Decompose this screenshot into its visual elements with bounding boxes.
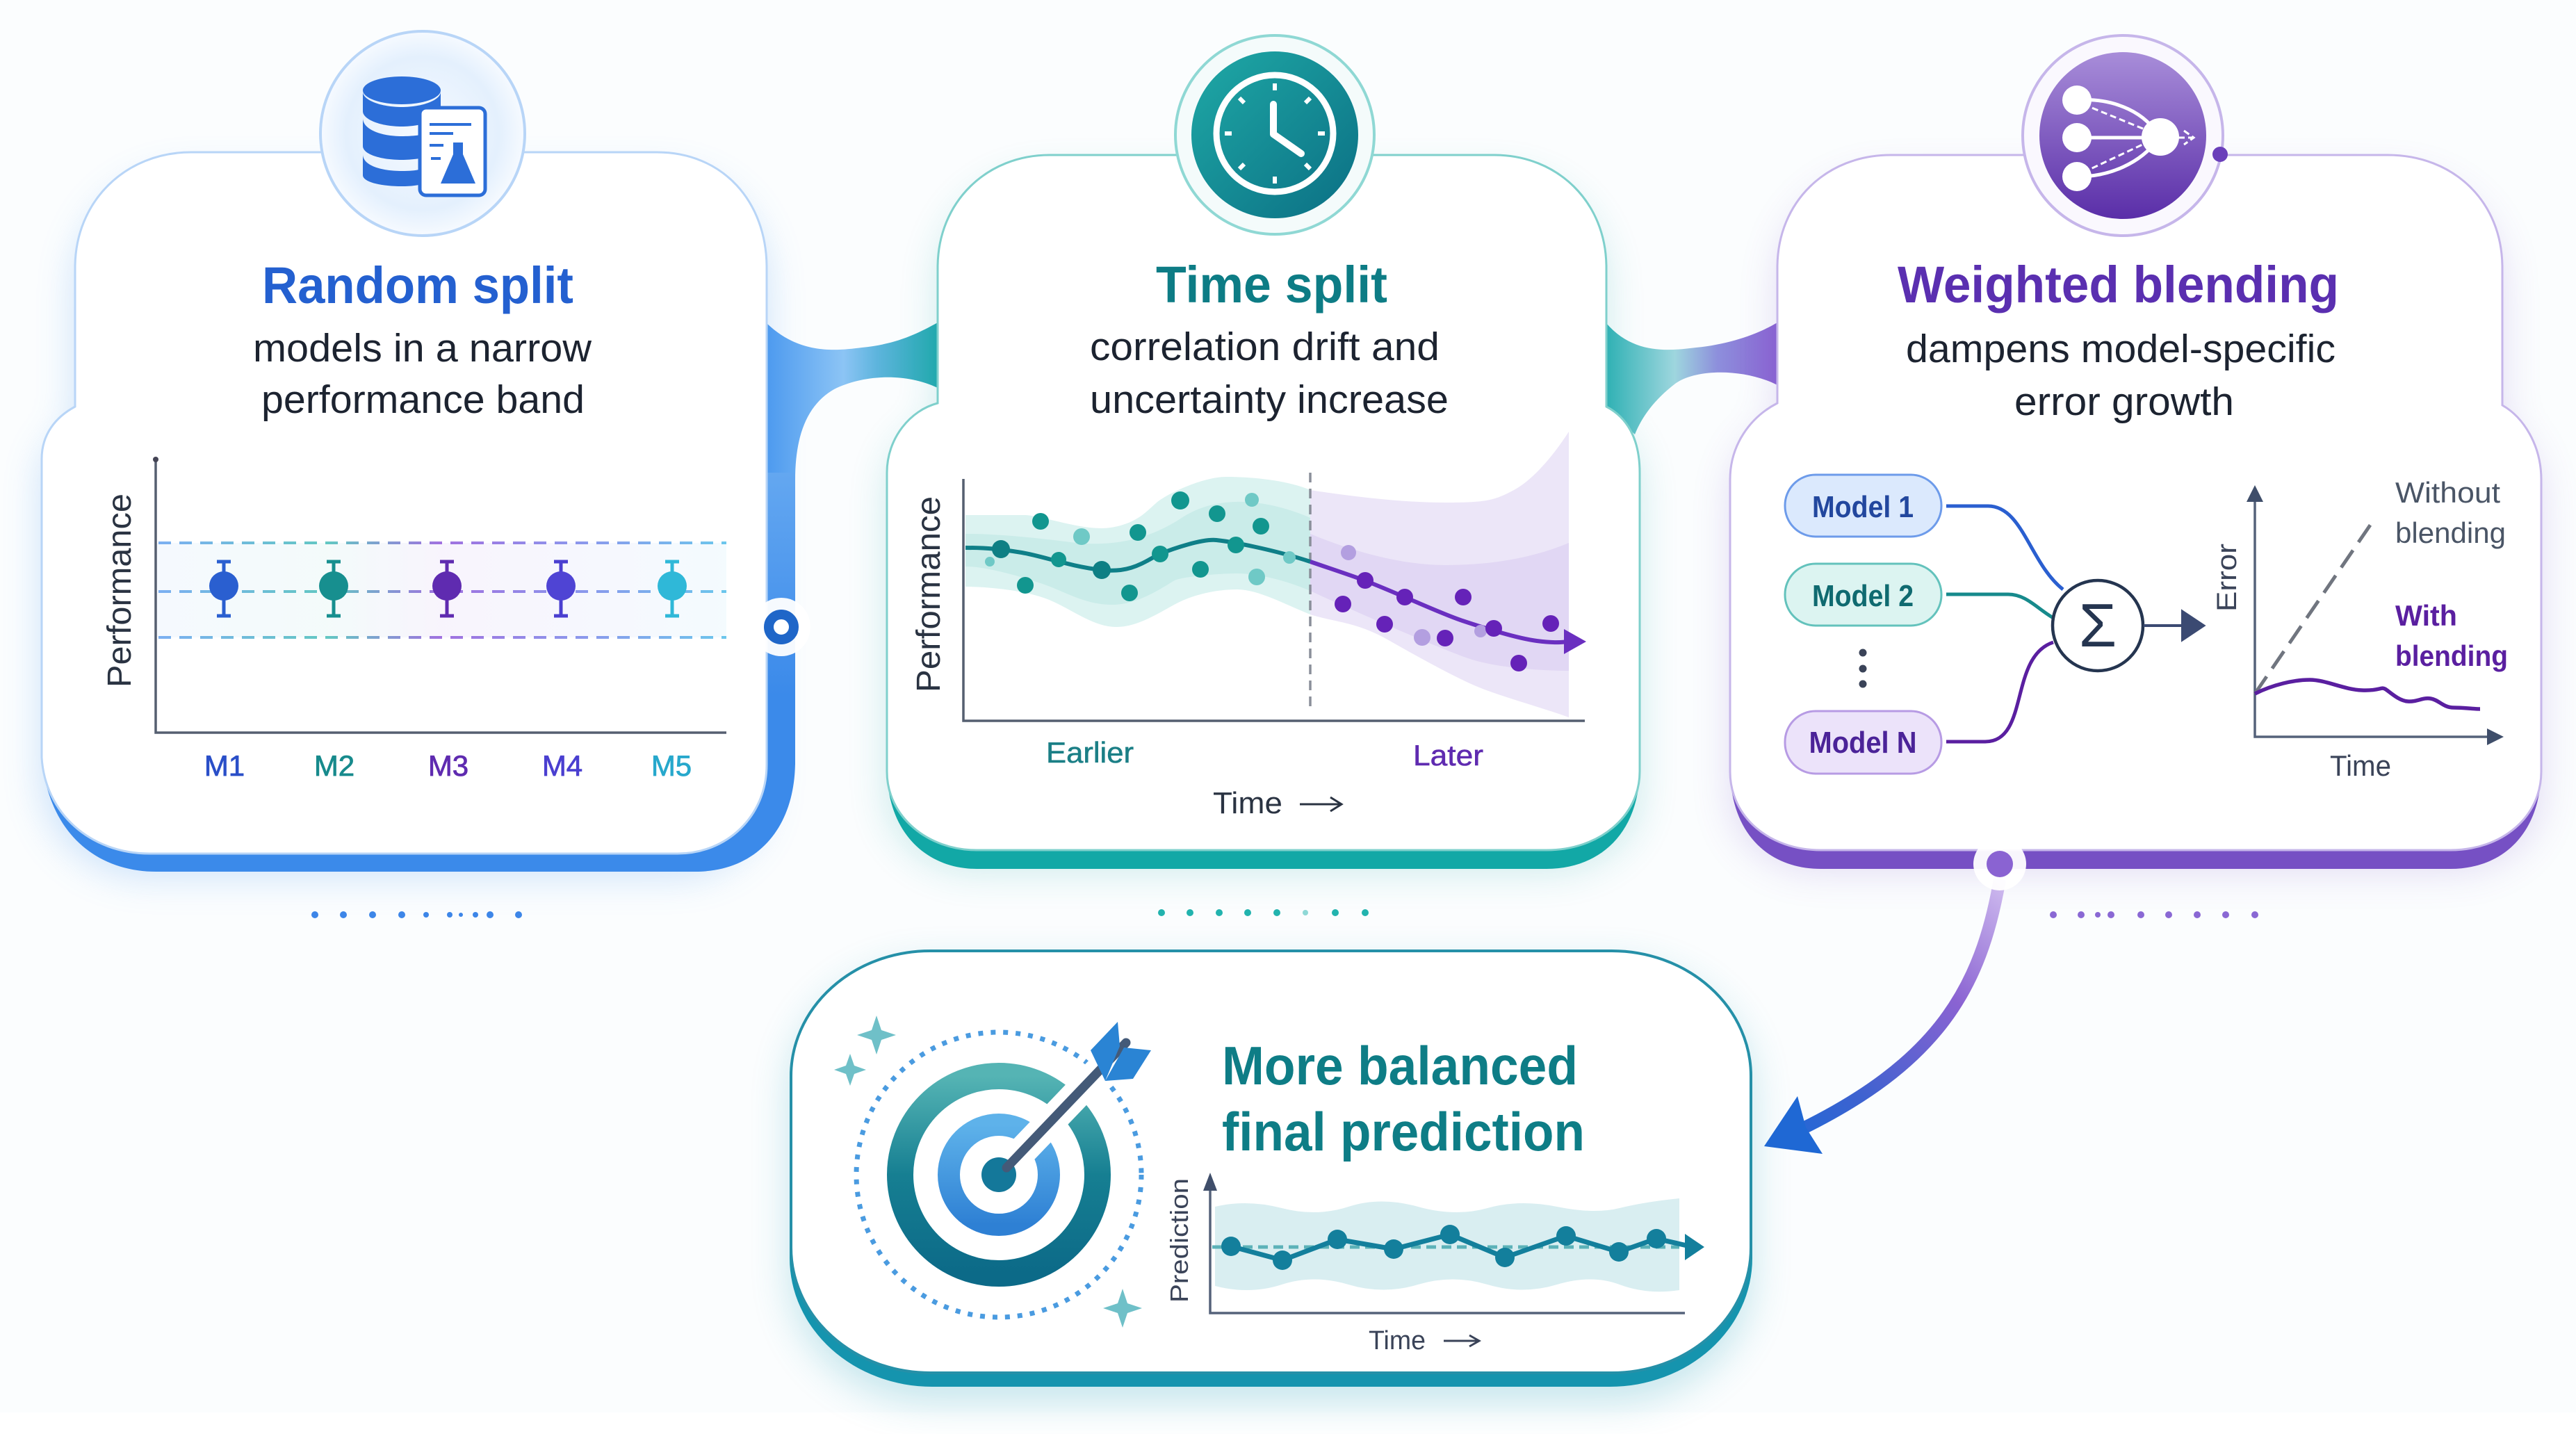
model labels: M2: [314, 749, 354, 782]
connector: random split to time split: [767, 323, 938, 480]
model labels: M5: [651, 749, 692, 782]
subtitle: models in a narrow: [253, 326, 592, 370]
chart: prediction over time: [1165, 1173, 1704, 1355]
connector node: [752, 598, 810, 656]
panel: weighted blending: [1730, 35, 2541, 918]
axis label: Performance: [911, 496, 947, 692]
model labels: M3: [428, 749, 468, 782]
icon: database and lab document: [320, 31, 525, 236]
diagram: sum node: Σ: [2079, 591, 2117, 660]
chart: prediction over time: Prediction: [1165, 1178, 1193, 1303]
arrow: blending to final prediction: [1764, 879, 2000, 1154]
icon: clock: [1175, 35, 1374, 234]
chart: performance over time: [911, 432, 1586, 820]
sparkles: [834, 1016, 1142, 1328]
heading: More balanced: [1222, 1035, 1578, 1096]
earlier trend: [965, 540, 1310, 571]
subtitle: performance band: [261, 377, 585, 422]
card: [1730, 155, 2541, 850]
chart: performance over time: Later: [1413, 739, 1483, 772]
model labels: M1: [204, 749, 245, 782]
card: [887, 155, 1640, 850]
diagram: model pills: Model N: [1809, 726, 1917, 760]
panel: more balanced final prediction: [790, 951, 1752, 1403]
diagram: sum node: [2053, 580, 2143, 671]
uncertainty band: later: [1310, 432, 1569, 717]
chart: prediction over time: Time: [1369, 1326, 1426, 1355]
diagram: model pills: [1785, 475, 1941, 774]
chart: performance over time: Time: [1213, 786, 1282, 820]
axis captions: Earlier: [1046, 736, 1134, 769]
later points: [1335, 545, 1559, 671]
heading: Random split: [262, 256, 573, 314]
axes: [963, 479, 1585, 721]
diagram: model pills: Model 1: [1812, 490, 1914, 524]
chart: error over time: Without: [2395, 476, 2500, 509]
pagination dots: [311, 911, 522, 918]
earlier points: [985, 491, 1296, 601]
card base edge: [887, 768, 1640, 869]
card: [791, 951, 1751, 1373]
card: [42, 152, 767, 854]
chart: error over time: With: [2395, 599, 2457, 632]
chart: error over time: blending: [2395, 639, 2508, 672]
chart: error over time: Error: [2212, 544, 2242, 612]
subtitle: uncertainty increase: [1090, 377, 1449, 422]
pagination dots: [1158, 909, 1369, 916]
chart: error over time: Time: [2330, 749, 2391, 782]
axis label: Performance: [101, 494, 138, 687]
arrow: [2144, 612, 2203, 639]
chart: error over time: blending: [2395, 516, 2506, 549]
card base edge: [42, 758, 795, 872]
model labels: M4: [542, 749, 582, 782]
heading: Weighted blending: [1898, 256, 2339, 313]
panel: time split: [887, 35, 1777, 916]
subtitle: [1090, 325, 1449, 422]
later trend: [1310, 562, 1572, 642]
model labels: [204, 749, 692, 782]
panel: random split: [42, 31, 938, 918]
connector node: blending output: [1973, 838, 2026, 890]
heading: Time split: [1156, 256, 1387, 313]
card base edge: [790, 951, 1752, 1387]
icon: target and arrow: [834, 1016, 1151, 1328]
connector: time split to weighted blending: [1606, 323, 1777, 434]
diagram: model pills: Model 2: [1812, 579, 1914, 613]
pagination dots: [2050, 911, 2258, 918]
subtitle: dampens model-specific: [1906, 327, 2335, 371]
chart: error over time: [2212, 476, 2508, 782]
model markers: [217, 562, 679, 616]
heading: final prediction: [1222, 1101, 1585, 1162]
subtitle: [1906, 327, 2335, 424]
diagram: connecting lines: [1946, 506, 2063, 742]
heading: [1222, 1035, 1585, 1162]
subtitle: correlation drift and: [1090, 325, 1440, 369]
card base edge: [1730, 768, 2541, 869]
card right side edge: [758, 473, 795, 765]
icon: blending network: [2023, 35, 2228, 236]
uncertainty band: earlier: [965, 477, 1310, 627]
chart: model performance band: [101, 457, 726, 782]
subtitle: error growth: [2014, 380, 2234, 424]
subtitle: [253, 326, 592, 422]
